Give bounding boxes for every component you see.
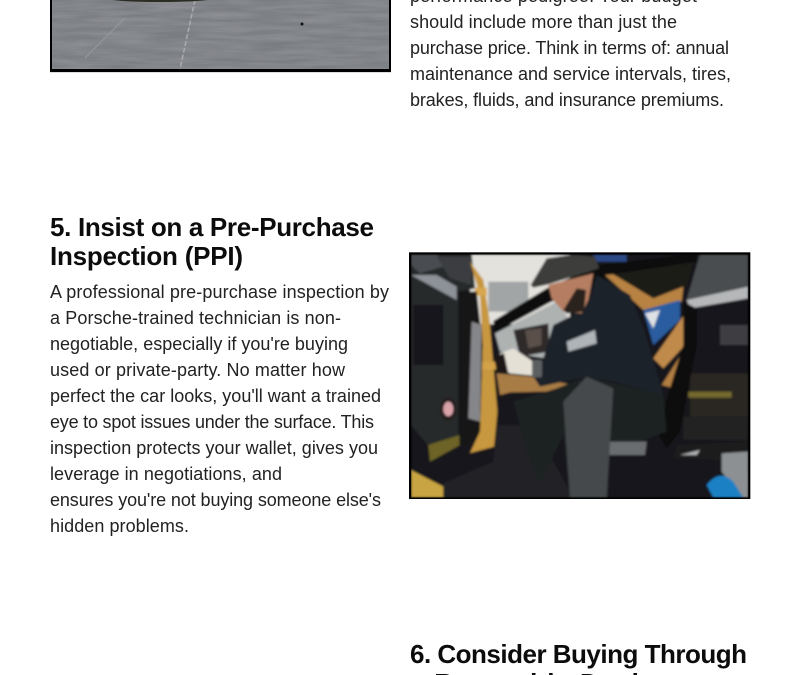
text block: pre-purchase inspection paragraph: A professional pre-purchase inspection by — [50, 282, 389, 302]
tan door trim piece — [497, 373, 573, 395]
man: hoodie — [533, 275, 663, 395]
text block: pre-purchase inspection paragraph: hidden problems. — [50, 516, 189, 536]
heading: step 5 — [50, 212, 374, 271]
text block: pre-purchase inspection paragraph: leverage in negotiations, and — [50, 464, 282, 484]
interior tan — [605, 274, 683, 310]
door jamb tan — [470, 262, 497, 453]
text block: pre-purchase inspection paragraph: a Porsche-trained technician is non- — [50, 308, 341, 328]
man: pants — [514, 378, 668, 458]
floor clutter — [607, 442, 647, 455]
text block: budget paragraph: purchase price. Think in terms of: annual — [410, 38, 729, 58]
text block: budget paragraph — [410, 0, 731, 110]
photo: technician inspecting car door — [409, 252, 750, 499]
man: glove and watch — [498, 348, 533, 376]
car body left — [411, 254, 475, 452]
wall — [470, 254, 570, 324]
text block: pre-purchase inspection paragraph: perfect the car looks, you'll want a trained — [50, 386, 381, 406]
text block: budget paragraph: maintenance and service intervals, tires, — [410, 64, 731, 84]
text block: pre-purchase inspection paragraph: ensures you're not buying someone else's — [50, 490, 381, 510]
text block: pre-purchase inspection paragraph: inspection protects your wallet, gives you — [50, 438, 378, 458]
windshield view — [495, 302, 573, 358]
tire — [443, 425, 570, 498]
photo: concrete floor under car — [50, 0, 391, 73]
man: beanie — [531, 254, 599, 288]
heading: step 5: 5. Insist on a Pre-Purchase — [50, 212, 374, 242]
text block: pre-purchase inspection paragraph: negotiable, especially if you're buying — [50, 334, 348, 354]
right car door — [687, 254, 748, 300]
heading: step 5: Inspection (PPI) — [50, 241, 243, 271]
headliner — [603, 262, 694, 278]
roof — [493, 254, 697, 332]
text block: pre-purchase inspection paragraph — [50, 282, 389, 536]
man: face — [548, 273, 593, 313]
text block: budget paragraph: brakes, fluids, and insurance premiums. — [410, 90, 724, 110]
heading: step 6: 6. Consider Buying Through — [410, 639, 747, 669]
text block: pre-purchase inspection paragraph: eye to spot issues under the surface. This — [50, 412, 374, 432]
text block: budget paragraph: should include more than just the — [410, 12, 677, 32]
text block: pre-purchase inspection paragraph: used or private-party. No matter how — [50, 360, 346, 380]
